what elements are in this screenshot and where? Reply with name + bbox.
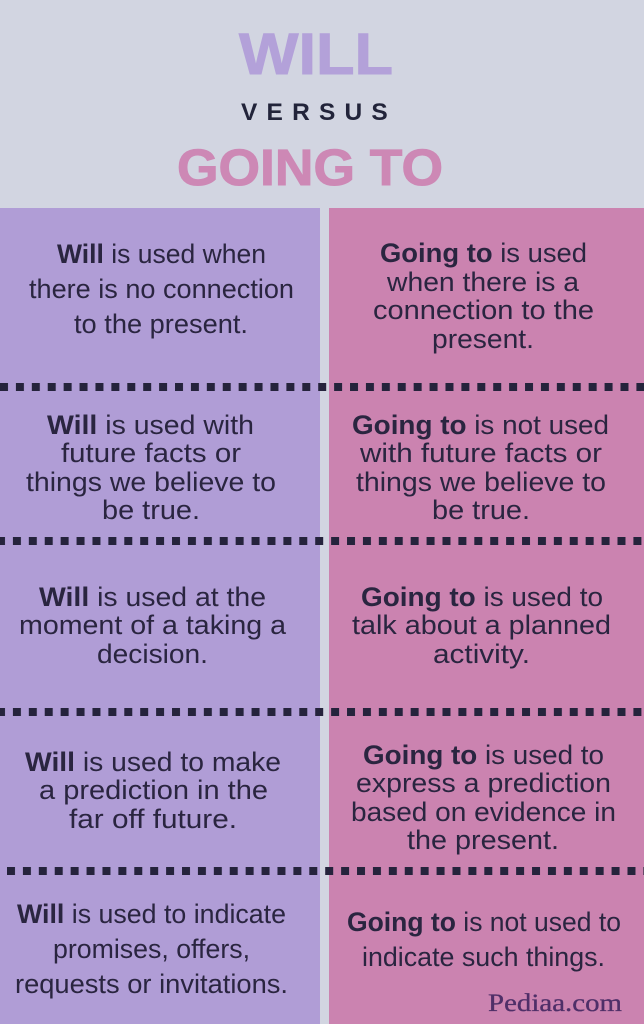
going to row 2 text [352,410,609,525]
will row 3 text: moment of a taking a [19,610,287,640]
will row 1 text: to the present. [74,309,248,339]
going to row 4 text: express a prediction [356,768,611,798]
will row 5 text [15,899,288,999]
title: Going to: GOING TO [177,139,443,196]
will row 3 text: Will is used at the [39,582,266,612]
going to row 4 text [351,740,616,855]
will row 5 text: Will is used to indicate [17,899,286,929]
will row 2 text: Will is used with [47,410,254,440]
will row 2 text: things we believe to [26,467,276,497]
will row 4 text [25,747,281,834]
will row 4 text: a prediction in the [39,775,268,805]
going to row 2 text: Going to is not used [352,410,609,440]
title: Will: WILL [239,22,393,87]
will row 1 text: there is no connection [29,274,294,304]
title: versus: VERSUS [241,99,397,126]
going to row 3 text: activity. [433,639,530,669]
will row 4 text: far off future. [69,804,237,834]
going to row 2 text: be true. [432,495,530,525]
going to row 1 text: when there is a [386,267,580,297]
divider row 2 [0,537,644,545]
going to row 3 text: Going to is used to [361,582,603,612]
watermark: Pediaa.com: Pediaa.com [488,990,623,1017]
going to row 3 text [352,582,611,669]
going to row 3 text: talk about a planned [352,610,611,640]
divider row 3 [0,708,644,716]
will row 5 text: requests or invitations. [15,969,288,999]
going to row 4 text: based on evidence in [351,797,616,827]
going to row 5 text: indicate such things. [362,942,605,972]
panel: will column [0,208,320,1024]
divider row 4 [0,867,644,875]
going to row 1 text: present. [432,324,534,354]
going to row 2 text: with future facts or [359,438,602,468]
will row 2 text: future facts or [61,438,241,468]
going to row 1 text: Going to is used [380,238,587,268]
going to row 5 text: Going to is not used to [347,907,621,937]
will row 4 text: Will is used to make [25,747,281,777]
divider row 1 [0,383,644,391]
going to row 1 text [373,238,594,354]
will row 1 text [29,239,294,339]
will row 3 text: decision. [97,639,208,669]
panel: going to column [329,208,644,1024]
going to row 1 text: connection to the [373,295,594,325]
will row 1 text: Will is used when [57,239,266,269]
going to row 4 text: Going to is used to [363,740,604,770]
going to row 5 text [347,907,621,972]
going to row 2 text: things we believe to [356,467,606,497]
will row 3 text [19,582,287,669]
going to row 4 text: the present. [407,825,559,855]
will row 2 text [26,410,276,525]
will row 2 text: be true. [102,495,200,525]
will row 5 text: promises, offers, [53,934,250,964]
